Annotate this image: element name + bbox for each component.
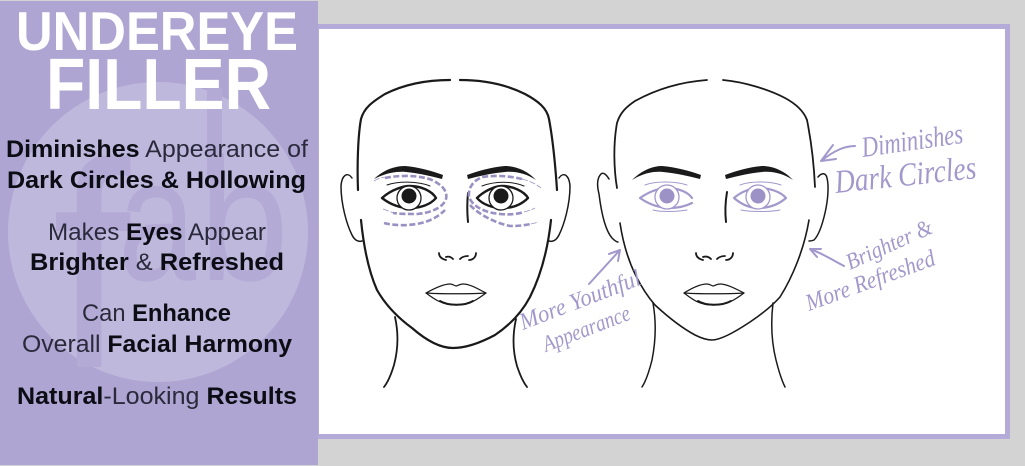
title: UNDEREYE (16, 0, 298, 62)
title: FILLER (46, 45, 271, 125)
benefit: facial harmony (22, 300, 293, 358)
benefit: brighter eyes: Brighter & Refreshed (30, 249, 284, 276)
arrow (589, 250, 620, 284)
benefit: diminishes dark circles (6, 136, 308, 194)
head outline (341, 80, 570, 387)
benefit: natural results: Natural-Looking Results (17, 383, 297, 410)
panel: benefits sidebar (0, 0, 318, 465)
annotation: more youthful appearance (515, 250, 645, 357)
lips (684, 284, 744, 305)
benefit: diminishes dark circles: Dark Circles & Hollowing (7, 167, 306, 194)
benefit: brighter eyes: Makes Eyes Appear (48, 219, 266, 246)
face: before with dashed treatment areas (341, 80, 570, 387)
annotation: diminishes dark circles: Diminishes (859, 118, 965, 164)
eye: right (477, 182, 528, 210)
benefit: facial harmony: Can Enhance (82, 300, 231, 327)
eyebrows (632, 166, 701, 180)
eye: right (734, 182, 786, 212)
annotation: more youthful appearance: Appearance (537, 300, 634, 357)
lips (426, 284, 486, 305)
watermark: fab logo: a (118, 123, 197, 318)
eyebrows (374, 166, 443, 179)
eye: left (382, 182, 436, 210)
illustration frame (316, 24, 1010, 439)
watermark: fab logo: f (52, 103, 131, 430)
arrow (821, 145, 855, 161)
nose (439, 253, 453, 260)
annotation: brighter and more refreshed: More Refreshed (801, 245, 940, 317)
eye: left (640, 182, 692, 212)
face: after with lavender eyes (598, 80, 828, 387)
benefit: facial harmony: Overall Facial Harmony (22, 331, 293, 358)
arrow (810, 249, 844, 266)
title (16, 0, 298, 125)
watermark: fab logo (8, 82, 308, 430)
annotation: brighter and more refreshed (801, 214, 940, 317)
dashed treatment outlines (374, 176, 541, 226)
annotation: more youthful appearance: More Youthful (515, 265, 645, 336)
benefit: brighter eyes (30, 219, 284, 276)
nose (696, 253, 711, 260)
annotation: brighter and more refreshed: Brighter & (842, 214, 936, 275)
benefit: diminishes dark circles: Diminishes Appearance of (6, 136, 308, 163)
annotation: diminishes dark circles (821, 118, 978, 201)
watermark: fab logo: b (199, 123, 289, 318)
annotation: diminishes dark circles: Dark Circles (832, 150, 978, 201)
head outline (598, 80, 828, 387)
